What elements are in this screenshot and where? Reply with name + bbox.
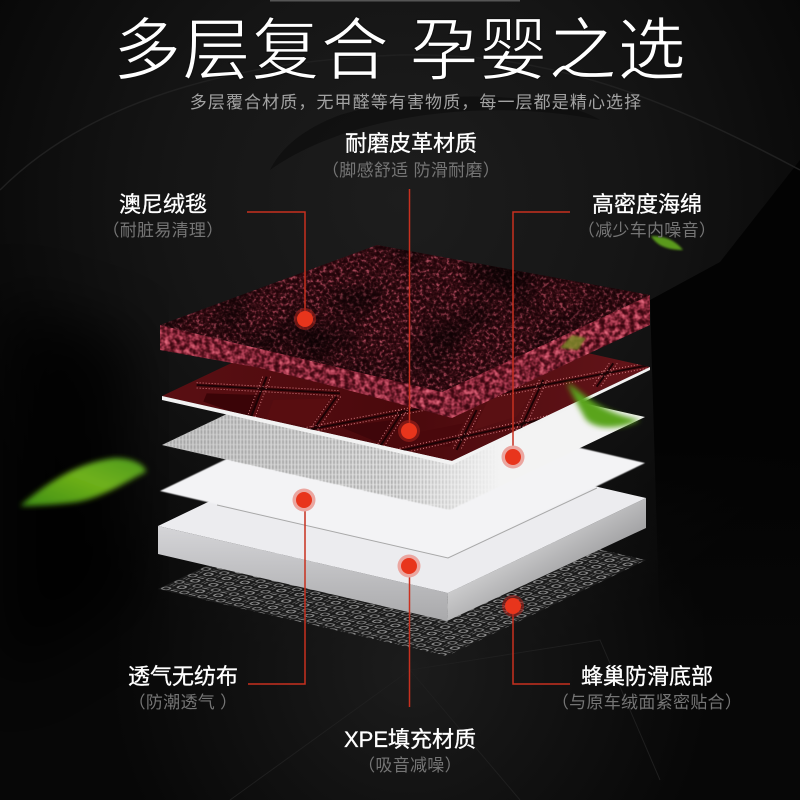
layer: Aussie plush carpet [160, 245, 650, 418]
layer: breathable non-woven [160, 396, 645, 558]
label: XPE: XPE填充材质 [344, 727, 476, 752]
label: non-woven [128, 664, 238, 712]
leaf: tint on carpet [560, 335, 586, 350]
subtitle: 多层覆合材质，无甲醛等有害物质，每一层都是精心选择 [190, 93, 642, 112]
leaf: left [20, 458, 146, 506]
label: plush carpet: 澳尼绒毯 [119, 192, 207, 217]
marker: honeycomb [502, 595, 524, 617]
label: non-woven: （防潮透气 ） [129, 693, 237, 712]
leaf: small top right [651, 236, 683, 250]
label: non-woven: 透气无纺布 [128, 664, 238, 689]
leaf: right over layers [567, 382, 640, 427]
layer: XPE filling [158, 431, 646, 621]
label: sponge: 高密度海绵 [592, 192, 702, 217]
label: leather: 耐磨皮革材质 [345, 131, 477, 156]
label: honeycomb: 蜂巢防滑底部 [581, 664, 713, 689]
connector lines [247, 189, 570, 707]
marker: XPE [398, 554, 420, 578]
marker: non-woven [292, 488, 316, 512]
layer: leather [162, 344, 650, 464]
marker: leather [398, 420, 420, 442]
layer: honeycomb base [158, 542, 646, 656]
label: XPE [344, 727, 476, 775]
title: 多层复合 孕婴之选 [113, 13, 687, 89]
label: leather [322, 131, 500, 180]
label: honeycomb [552, 664, 742, 712]
label: plush carpet [102, 192, 224, 240]
label: sponge: （减少车内噪音） [578, 221, 716, 240]
marker: carpet [294, 308, 316, 330]
layer: high density sponge [162, 402, 645, 510]
label: plush carpet: （耐脏易清理） [102, 221, 224, 240]
label: honeycomb: （与原车绒面紧密贴合） [552, 693, 742, 712]
marker: sponge [502, 446, 524, 468]
label: leather: （脚感舒适 防滑耐磨） [322, 161, 500, 180]
label: sponge [578, 192, 716, 240]
label: XPE: （吸音减噪） [358, 756, 462, 775]
